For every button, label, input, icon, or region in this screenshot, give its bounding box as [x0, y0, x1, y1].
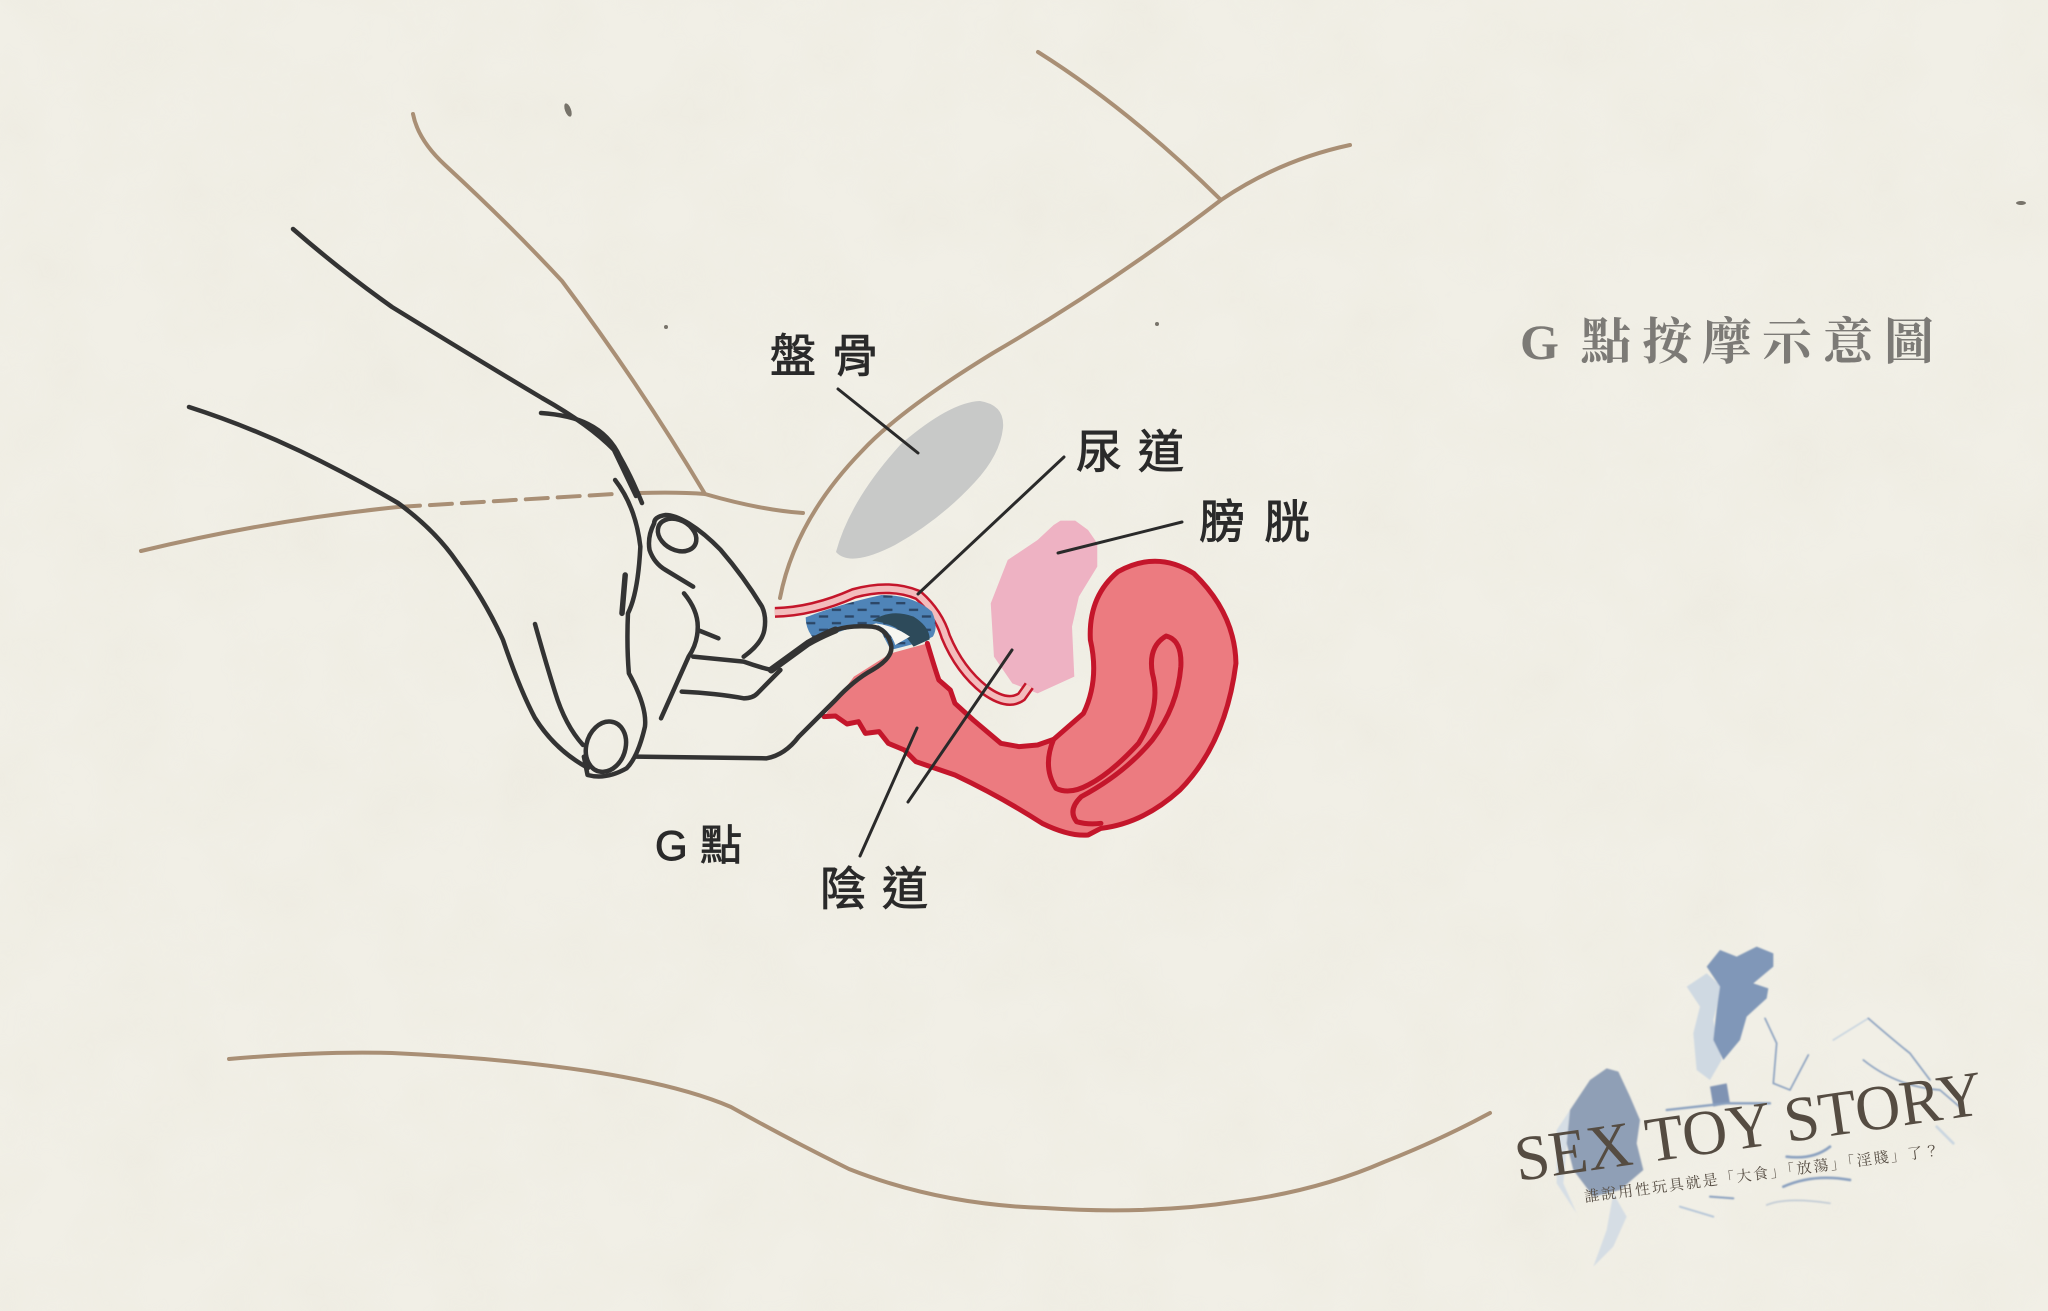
- leader line: pelvic bone: [838, 389, 918, 453]
- logo ink wash mountains: [1557, 947, 1963, 1267]
- fingertip pressure band: [872, 613, 930, 647]
- urethra: [775, 589, 1029, 700]
- hand: fingers: [582, 480, 891, 776]
- leader line: vagina: [860, 728, 917, 856]
- label: bladder: 膀胱: [1199, 496, 1310, 548]
- label: urethra: 尿道: [1076, 426, 1184, 478]
- internal organs: [582, 480, 1236, 835]
- label: pelvic bone: 盤骨: [770, 330, 878, 382]
- paper specks: [563, 102, 2026, 329]
- title: G 點按摩示意圖: [1520, 314, 1934, 370]
- vagina and uterus: [824, 561, 1236, 835]
- pelvic bone: [836, 401, 1003, 559]
- body contour lines: [141, 52, 1490, 1210]
- leader line: G-spot: [908, 650, 1012, 802]
- G-spot mesh area: [806, 595, 936, 650]
- hand: forearm lines: [189, 229, 642, 768]
- logo tagline: 誰說用性玩具就是「大食」「放蕩」「淫賤」了？: [1583, 1141, 1940, 1206]
- logo title: SEX TOY STORY: [1510, 1057, 1987, 1195]
- leader line: urethra: [918, 457, 1064, 594]
- label: vagina: 陰道: [820, 863, 928, 915]
- label: G spot: G點: [655, 822, 742, 869]
- bladder: [991, 521, 1097, 693]
- leader line: bladder: [1058, 522, 1182, 553]
